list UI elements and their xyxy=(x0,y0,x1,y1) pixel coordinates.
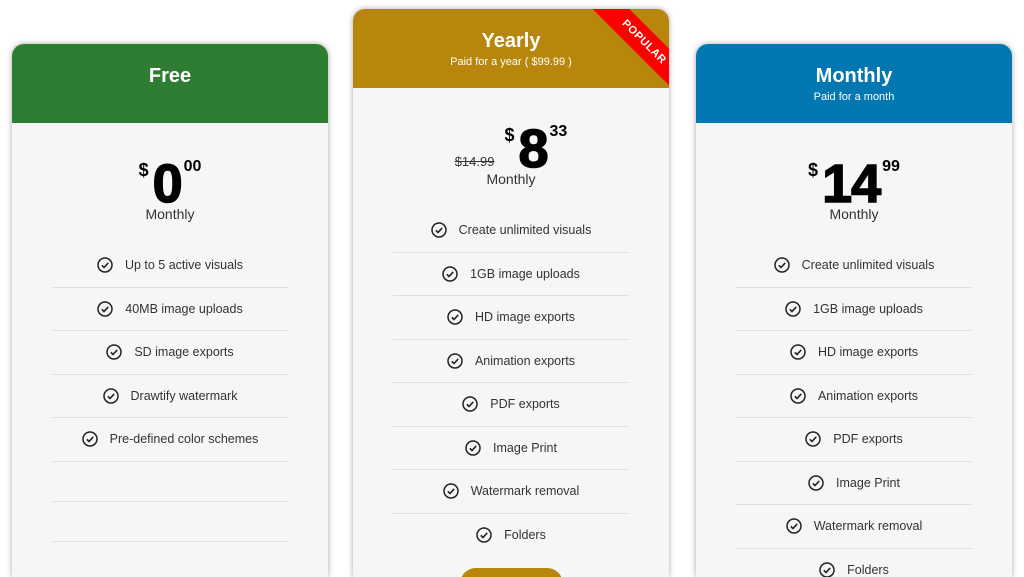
feature list: yearly: Folders xyxy=(504,528,546,542)
feature list: yearly: 1GB image uploads xyxy=(470,267,580,281)
header: monthly xyxy=(696,44,1012,123)
header: yearly xyxy=(353,9,669,88)
feature list: monthly: Watermark removal xyxy=(814,519,922,533)
feature list: monthly: 1GB image uploads xyxy=(813,302,923,316)
header: free xyxy=(12,44,328,123)
header: monthly: Paid for a month xyxy=(814,91,894,103)
header: free: Free xyxy=(149,65,191,87)
ribbon: popular xyxy=(589,0,699,97)
feature list: yearly: HD image exports xyxy=(475,310,575,324)
feature list: monthly: Create unlimited visuals xyxy=(802,258,934,272)
label: monthly: Monthly xyxy=(486,171,536,187)
button: yearly xyxy=(460,568,563,577)
panel: free plan xyxy=(12,44,328,577)
feature list: free: 40MB image uploads xyxy=(125,302,243,316)
feature list: monthly: Animation exports xyxy=(818,389,918,403)
price: yearly: $14.99 xyxy=(455,154,494,169)
price: free: 00 xyxy=(184,158,201,175)
feature list: yearly xyxy=(393,222,629,543)
price: free: 0 xyxy=(153,154,182,214)
feature list: monthly: HD image exports xyxy=(818,345,918,359)
price: yearly: 8 xyxy=(518,119,548,179)
price: free: $ xyxy=(139,160,149,180)
price: monthly: $ xyxy=(808,160,818,180)
feature list: free: SD image exports xyxy=(134,345,234,359)
header: yearly: Yearly xyxy=(482,30,540,52)
feature list: yearly: Create unlimited visuals xyxy=(459,223,591,237)
price: monthly xyxy=(808,154,900,214)
header: yearly: Paid for a year ( $99.99 ) xyxy=(450,56,572,68)
feature list: monthly xyxy=(736,257,972,577)
price: yearly: $ xyxy=(504,125,514,145)
feature list: yearly: Watermark removal xyxy=(471,484,579,498)
feature list: yearly: Image Print xyxy=(493,441,557,455)
price: free xyxy=(138,154,201,214)
feature list: free: Pre-defined color schemes xyxy=(110,432,258,446)
panel: monthly plan xyxy=(696,44,1012,577)
header: monthly: Monthly xyxy=(816,65,892,87)
price: monthly: 14 xyxy=(822,154,880,214)
label: monthly: Monthly xyxy=(145,206,195,222)
price: yearly xyxy=(454,119,567,179)
feature list: monthly: Folders xyxy=(847,563,889,577)
feature list: monthly: PDF exports xyxy=(833,432,903,446)
feature list: monthly: Image Print xyxy=(836,476,900,490)
ribbon: popular: POPULAR xyxy=(620,18,668,66)
price: monthly: 99 xyxy=(882,158,900,175)
feature list: yearly: PDF exports xyxy=(490,397,560,411)
panel: yearly plan xyxy=(353,9,669,577)
feature list: free xyxy=(52,257,288,542)
price: yearly: 33 xyxy=(550,123,567,140)
feature list: free: Up to 5 active visuals xyxy=(125,258,243,272)
feature list: yearly: Animation exports xyxy=(475,354,575,368)
label: monthly: Monthly xyxy=(829,206,879,222)
feature list: free: Drawtify watermark xyxy=(131,389,237,403)
